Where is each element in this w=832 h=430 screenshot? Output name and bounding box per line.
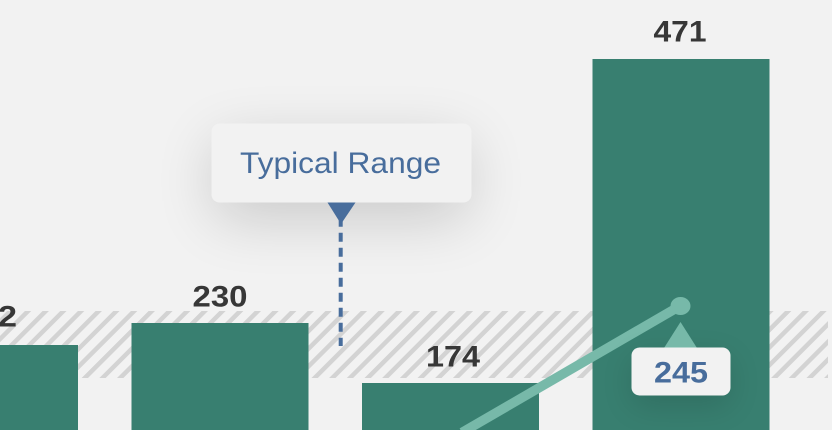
typical range band	[0, 311, 828, 378]
callout: 245	[632, 322, 730, 406]
callout: 245: 245	[654, 356, 708, 390]
pointer	[328, 202, 356, 224]
bar: 230	[132, 280, 308, 430]
bar: 471: 471	[654, 16, 706, 48]
trend line with end marker	[462, 297, 690, 430]
callout: typical range: Typical Range	[240, 147, 441, 180]
callout: typical range	[212, 124, 472, 346]
bar: 174	[362, 340, 539, 430]
bar: 230: 230	[192, 280, 248, 314]
bar: 174: 174	[426, 340, 480, 374]
callout shadow: typical range	[215, 142, 467, 218]
bar: 471	[592, 16, 770, 430]
bar: partial left	[0, 300, 78, 430]
dashed leader line	[339, 218, 343, 346]
